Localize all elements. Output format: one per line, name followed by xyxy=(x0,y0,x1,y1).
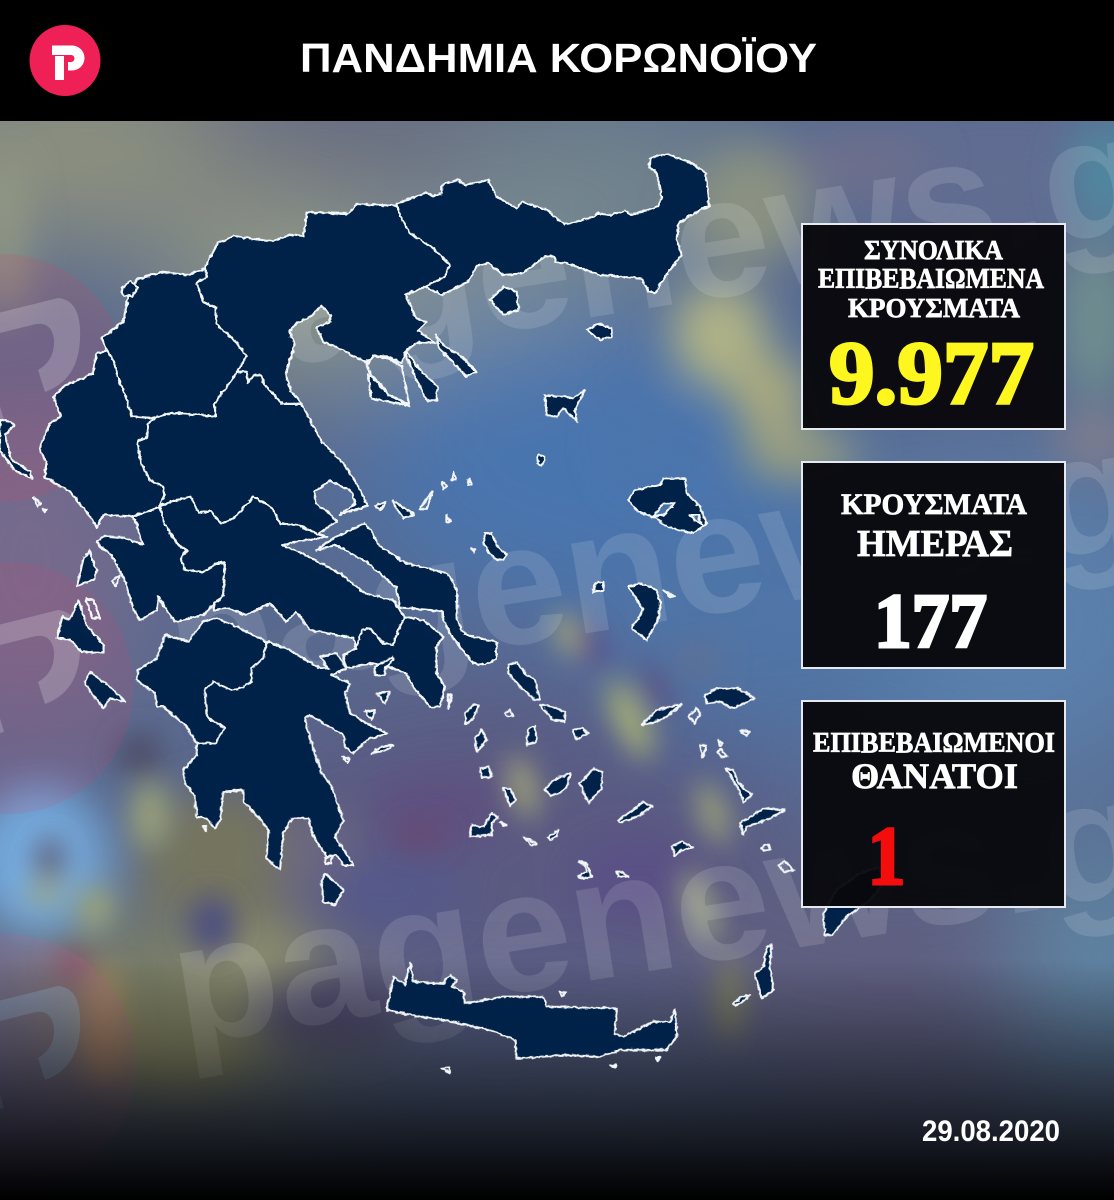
islet: Leros xyxy=(717,749,727,757)
island: Aegina xyxy=(377,692,390,703)
region: Western Peloponnese xyxy=(137,618,267,743)
island: Ios xyxy=(548,830,558,840)
island: Syros xyxy=(527,727,537,745)
island: Kythira xyxy=(322,873,343,905)
island: Tinos xyxy=(540,705,565,722)
islets: Oinousses xyxy=(663,590,675,597)
island: Kefalonia xyxy=(57,600,104,652)
island: Chios xyxy=(628,583,660,640)
region: Peloponnese xyxy=(183,642,387,870)
islet: Gavdos xyxy=(442,1067,450,1073)
islet: Kimolos xyxy=(500,822,506,826)
islet: Tilos xyxy=(778,862,794,872)
island: Serifos xyxy=(480,767,492,777)
border: Boeotia and Attica xyxy=(356,617,405,648)
heading line 1: ΣΥΝΟΛΙΚΑ xyxy=(864,235,1003,265)
island: Kos xyxy=(740,808,785,835)
island: Paros xyxy=(545,773,570,795)
island: Agios Efstratios xyxy=(537,455,545,466)
region: Central Macedonia xyxy=(196,204,450,404)
watermark logo top xyxy=(0,254,126,502)
island: Corfu xyxy=(0,420,32,479)
value: 9.977 xyxy=(829,324,1034,423)
heading line 2: ΘΑΝΑΤΟΙ xyxy=(851,756,1018,796)
region: Western Macedonia xyxy=(102,268,246,418)
region: Thessaly xyxy=(137,372,368,534)
header bar xyxy=(0,0,1114,121)
island: Andros xyxy=(508,663,540,700)
bottom fade to black xyxy=(0,960,1114,1200)
islet: Antipaxoi xyxy=(43,509,47,512)
island: Lefkada xyxy=(77,550,96,586)
islet: Lipsi xyxy=(718,740,723,746)
island: Psara xyxy=(593,582,604,592)
island: Naxos xyxy=(580,768,602,803)
island: Alonissos xyxy=(420,491,432,509)
islet: Gioura xyxy=(452,472,456,480)
watermark logo bottom xyxy=(0,934,136,1194)
island: Santorini xyxy=(578,862,592,878)
island: Thasos xyxy=(490,287,518,315)
watermark logo middle xyxy=(0,562,134,814)
heading line 3: ΚΡΟΥΣΜΑΤΑ xyxy=(848,293,1020,323)
map of Greece xyxy=(0,154,883,1073)
island: Kea xyxy=(465,705,478,724)
island: Crete xyxy=(387,963,677,1058)
island: Anafi xyxy=(617,872,628,877)
gulf: Kalloni xyxy=(653,503,675,517)
region: Central Greece and Attica xyxy=(159,497,445,707)
Kassandra outline xyxy=(367,356,409,404)
islet: Kyra Panagia xyxy=(443,481,447,490)
region: Epirus xyxy=(39,350,164,527)
island: Kythnos xyxy=(475,730,487,752)
heading line 1: ΕΠΙΒΕΒΑΙΩΜΕΝΟΙ xyxy=(813,728,1055,759)
islet: Spetses xyxy=(343,757,349,762)
island: Lemnos xyxy=(545,390,585,422)
island: Amorgos xyxy=(618,802,652,823)
logo xyxy=(30,25,100,96)
heading line 2: ΕΠΙΒΕΒΑΙΩΜΕΝΑ xyxy=(818,264,1045,295)
peninsula: Kassandra xyxy=(368,374,409,406)
panel: total confirmed cases xyxy=(802,224,1065,429)
islet: Dia xyxy=(559,992,566,996)
island: Kasos xyxy=(733,995,750,1006)
region: Aetolia-Acarnania xyxy=(97,507,225,622)
island: Athos peninsula xyxy=(436,334,477,376)
islets: Paxoi xyxy=(34,497,41,506)
island: Sifnos xyxy=(503,788,516,805)
islet: Nisyros xyxy=(762,844,770,851)
islet: Chrysi xyxy=(657,1057,660,1061)
lake: Prespa xyxy=(121,281,137,297)
gulf: Gera xyxy=(690,515,702,525)
date: 29.08.2020 xyxy=(922,1115,1060,1148)
island: Ikaria xyxy=(642,704,682,725)
panel: confirmed deaths xyxy=(802,701,1065,907)
island: Skyros xyxy=(483,533,507,560)
islets: Echinades xyxy=(111,575,120,586)
islet: Patmos xyxy=(700,745,707,757)
island: Samothrace xyxy=(587,324,612,340)
island: Skopelos xyxy=(393,500,414,518)
island: Euboea xyxy=(316,524,496,665)
heading line 2: ΗΜΕΡΑΣ xyxy=(857,523,1013,565)
islet: Sikinos xyxy=(523,837,537,846)
title: ΠΑΝΔΗΜΙΑ ΚΟΡΩΝΟΪΟΥ xyxy=(300,35,817,81)
island: Skiathos xyxy=(375,502,386,510)
island: Karpathos xyxy=(755,945,773,998)
island: Milos xyxy=(470,813,498,837)
island: Zakynthos xyxy=(85,672,125,708)
panel: daily cases xyxy=(802,462,1065,668)
island: Rhodes xyxy=(823,867,883,935)
islet: Skyropoula xyxy=(472,549,475,553)
islet: Skantzoura xyxy=(446,515,450,522)
islet: Koufonisi xyxy=(611,1065,617,1067)
islet: Agathonisi xyxy=(741,731,749,735)
islets: Fournoi xyxy=(688,708,700,723)
islet: Makronisos xyxy=(448,695,452,708)
island: Hydra xyxy=(372,745,393,753)
islet: Elafonisos xyxy=(325,857,332,863)
value: 1 xyxy=(868,810,906,903)
islet: Piperi xyxy=(468,479,471,485)
island: Samos xyxy=(705,688,755,708)
heading line 1: ΚΡΟΥΣΜΑΤΑ xyxy=(841,488,1027,521)
island: Salamina xyxy=(375,657,393,675)
value: 177 xyxy=(874,578,987,664)
island: Lesbos xyxy=(628,478,707,533)
island: Poros xyxy=(365,710,375,720)
region: Eastern Macedonia and Thrace xyxy=(397,154,709,295)
island: Astypalea xyxy=(672,842,693,856)
islet: Gyaros xyxy=(505,710,513,716)
islet: Ithaca xyxy=(86,599,100,618)
island: Mykonos xyxy=(573,728,588,739)
islet: Schiza xyxy=(203,826,206,832)
island: Kalymnos xyxy=(726,768,752,803)
peninsula: Sithonia xyxy=(405,352,437,400)
